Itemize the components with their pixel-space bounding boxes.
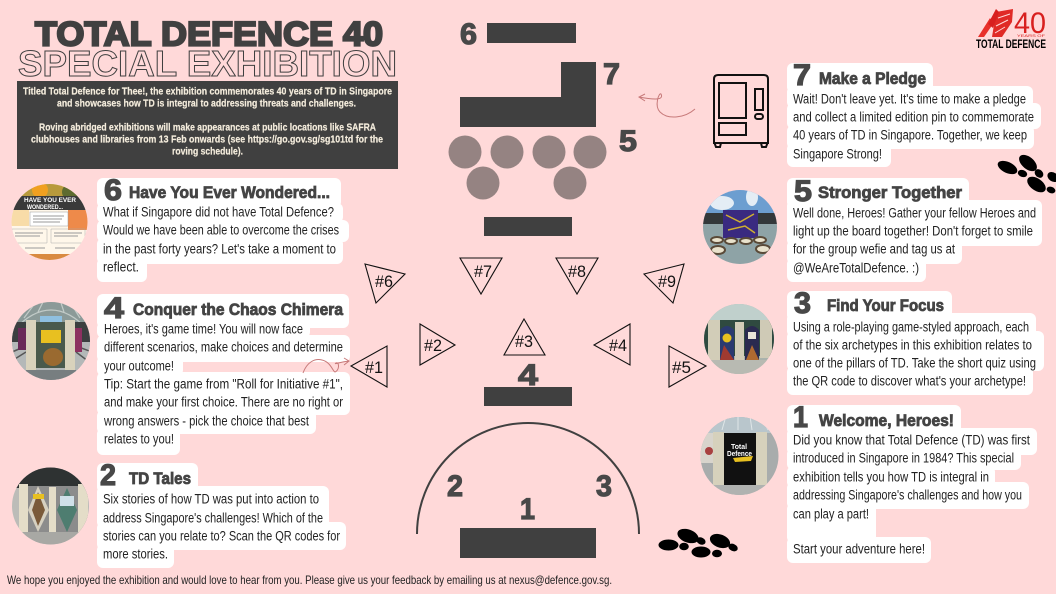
icon: pledge vending machine bbox=[714, 75, 768, 147]
text bubble bbox=[97, 294, 350, 455]
heading: TD Tales bbox=[129, 470, 191, 488]
body text: Six stories of how TD was put into action to bbox=[103, 492, 319, 506]
zone 5 seating circles bbox=[448, 136, 606, 200]
photo: entrance door: Defence bbox=[727, 451, 752, 458]
body text: different scenarios, make choices and determine bbox=[104, 340, 343, 354]
body text: Start your adventure here! bbox=[793, 542, 925, 556]
body text: Would we have been able to overcome the crises bbox=[103, 222, 339, 238]
panel: 1 welcome heroes bbox=[699, 401, 1037, 563]
zone 6 wall bbox=[487, 23, 576, 43]
body text: for the group wefie and tag us at bbox=[793, 242, 955, 256]
entrance arc bbox=[417, 423, 639, 534]
body text: reflect. bbox=[103, 260, 139, 274]
body text: exhibition tells you how TD is integral in bbox=[793, 470, 989, 484]
photo: TD tales stories bbox=[12, 468, 89, 544]
body text bbox=[793, 432, 1030, 556]
body text bbox=[793, 320, 1036, 388]
logo: Total Defence 40: YEARS OF bbox=[1017, 33, 1046, 38]
stop #8 bbox=[556, 258, 598, 294]
body text: and make your first choice. There are no right or bbox=[104, 394, 343, 410]
stop #7 bbox=[460, 258, 502, 294]
stop #3: #3 bbox=[515, 332, 533, 351]
number 3: 3 bbox=[596, 470, 612, 503]
panel: 2 TD tales bbox=[10, 459, 346, 568]
body text bbox=[793, 206, 1036, 276]
body text: Singapore Strong! bbox=[793, 146, 882, 162]
number 7: 7 bbox=[793, 59, 811, 92]
wall behind seating bbox=[484, 217, 572, 236]
zone 7 wall bbox=[460, 62, 596, 127]
stop #3 bbox=[504, 319, 545, 355]
stop #4: #4 bbox=[609, 336, 627, 355]
stop #5: #5 bbox=[672, 358, 691, 377]
body text: can play a part! bbox=[793, 506, 869, 522]
title bbox=[18, 16, 397, 84]
body text: in the past forty years? Let's take a moment to bbox=[103, 242, 336, 256]
intro text panel: and showcases how TD is integral to addressing threats and challenges. bbox=[57, 98, 356, 110]
intro text panel: Roving abridged exhibitions will make appearances at public locations like SAFRA bbox=[39, 122, 376, 134]
panel: 5 stronger together bbox=[700, 175, 1042, 282]
text bubble bbox=[787, 63, 1041, 167]
body text: Heroes, it's game time! You will now face bbox=[104, 322, 303, 336]
photo: have you ever wondered wall bbox=[11, 182, 89, 262]
footprints: bottom bbox=[658, 526, 739, 558]
number 2: 2 bbox=[447, 470, 463, 503]
number 2: 2 bbox=[100, 459, 116, 492]
intro text panel: Titled Total Defence for Thee!, the exhibition commemorates 40 years of TD in Singapore bbox=[23, 86, 392, 98]
heading: Stronger Together bbox=[818, 184, 963, 202]
intro text panel bbox=[17, 81, 398, 169]
title: TOTAL DEFENCE 40 bbox=[35, 16, 383, 54]
footer text: We hope you enjoyed the exhibition and would love to hear from you. Please give us your feedback by emailing us at nexus@defence.gov.sg. bbox=[7, 573, 612, 587]
logo: Total Defence 40: 40 bbox=[1014, 7, 1046, 40]
text bubble bbox=[97, 178, 349, 282]
number 1: 1 bbox=[520, 493, 535, 526]
text bubble bbox=[97, 463, 346, 568]
number 1: 1 bbox=[793, 401, 808, 434]
stop #4 bbox=[594, 324, 630, 365]
photo: archetype arches bbox=[704, 304, 774, 374]
body text: relates to you! bbox=[104, 432, 174, 446]
panel: 4 conquer the chaos chimera bbox=[10, 292, 350, 455]
footprints: top right bbox=[996, 152, 1056, 195]
title: SPECIAL EXHIBITION bbox=[18, 43, 397, 84]
stop #8: #8 bbox=[568, 262, 586, 281]
body text bbox=[103, 204, 339, 274]
text bubble bbox=[787, 405, 1037, 563]
number 6: 6 bbox=[460, 18, 477, 51]
heading: Find Your Focus bbox=[827, 297, 944, 315]
photo: have you ever wondered wall: HAVE YOU EVER bbox=[24, 198, 77, 204]
panel: 3 find your focus bbox=[702, 287, 1044, 395]
stop #5 bbox=[669, 346, 706, 387]
stop #6 bbox=[365, 264, 405, 303]
photo: entrance door bbox=[699, 415, 781, 497]
stop #1 bbox=[351, 346, 387, 387]
intro text panel: clubhouses and libraries from 13 Feb onwards (see https://go.gov.sg/sg101td for the bbox=[31, 134, 383, 146]
body text: What if Singapore did not have Total Defence? bbox=[103, 204, 334, 220]
body text: stories can you relate to? Scan the QR codes for bbox=[103, 528, 340, 544]
zone 4 wall bbox=[484, 387, 572, 406]
body text: Tip: Start the game from "Roll for Initiative #1", bbox=[104, 376, 343, 392]
text bubble bbox=[787, 291, 1044, 395]
heading: Have You Ever Wondered... bbox=[129, 184, 330, 202]
panel: 6 have you ever wondered bbox=[11, 174, 349, 282]
heading: Conquer the Chaos Chimera bbox=[133, 301, 344, 319]
body text: your outcome! bbox=[104, 358, 174, 374]
number 7: 7 bbox=[603, 58, 620, 91]
heading: Welcome, Heroes! bbox=[819, 412, 954, 430]
stop #9: #9 bbox=[658, 272, 676, 291]
stop #6: #6 bbox=[375, 272, 393, 291]
photo: have you ever wondered wall: WONDERED... bbox=[27, 205, 63, 211]
stop #9 bbox=[644, 264, 684, 303]
panel: 7 make a pledge bbox=[787, 59, 1041, 167]
body text: wrong answers - pick the choice that best bbox=[103, 414, 309, 428]
stop #2 bbox=[420, 324, 455, 365]
body text: @WeAreTotalDefence. :) bbox=[793, 260, 919, 276]
number 3: 3 bbox=[794, 287, 811, 320]
body text: more stories. bbox=[103, 546, 168, 562]
body text bbox=[103, 322, 343, 446]
number 5: 5 bbox=[619, 125, 637, 158]
number 5: 5 bbox=[794, 175, 812, 208]
body text bbox=[103, 492, 340, 562]
photo: chimera poster bbox=[10, 300, 92, 382]
stop #7: #7 bbox=[474, 262, 492, 281]
arrow: chimera to start bbox=[303, 358, 349, 373]
number 4: 4 bbox=[518, 359, 538, 392]
photo: group light board bbox=[703, 190, 777, 264]
number 6: 6 bbox=[104, 174, 122, 207]
number 4: 4 bbox=[104, 292, 124, 325]
body text bbox=[793, 92, 1034, 162]
heading: Make a Pledge bbox=[819, 70, 926, 88]
stop #1: #1 bbox=[365, 358, 383, 377]
stop #2: #2 bbox=[424, 336, 442, 355]
text bubble bbox=[787, 178, 1042, 282]
floor plan bbox=[351, 18, 706, 558]
zone 1 wall bbox=[460, 528, 596, 558]
arrow: to pledge machine bbox=[639, 94, 695, 117]
intro text panel: roving schedule). bbox=[172, 146, 243, 158]
logo: Total Defence 40 bbox=[976, 7, 1046, 51]
body text: address Singapore's challenges! Which of the bbox=[103, 510, 323, 526]
photo: entrance door: Total bbox=[731, 444, 747, 451]
